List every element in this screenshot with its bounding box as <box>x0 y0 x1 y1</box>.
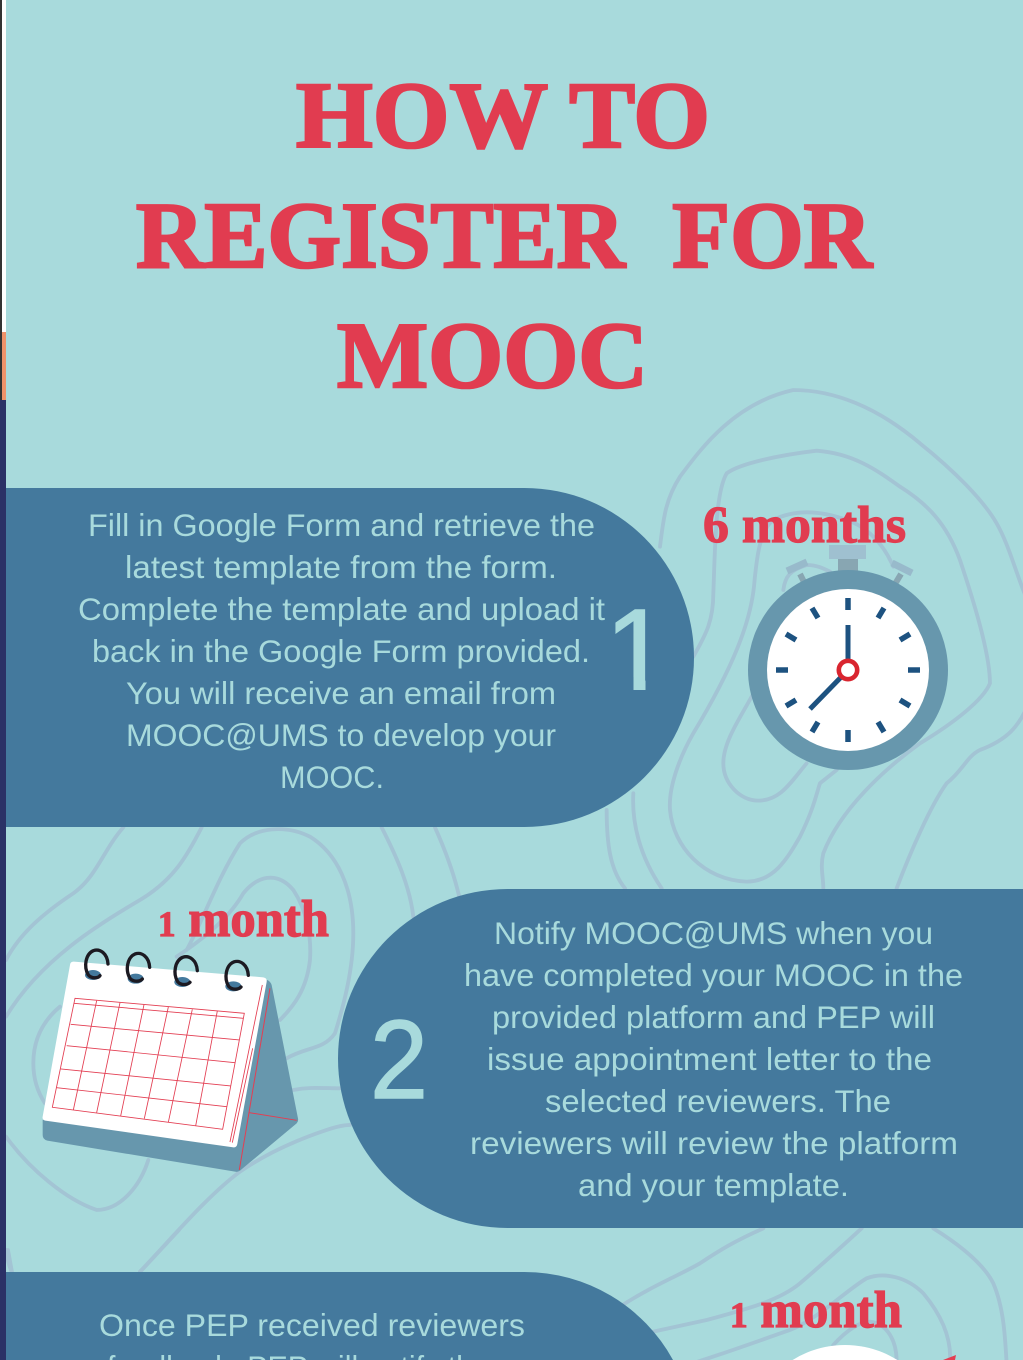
step 1 description: MOOC@UMS to develop your <box>126 717 556 753</box>
step 2 description: have completed your MOOC in the <box>464 957 963 993</box>
step 2 description: provided platform and PEP will <box>492 999 935 1035</box>
step 1 description: Complete the template and upload it <box>78 591 605 627</box>
background contour lines <box>6 390 1023 1360</box>
title: HOW TO <box>296 64 710 168</box>
icon: stopwatch <box>748 545 948 770</box>
icon: desk calendar <box>43 950 298 1172</box>
step 1 description: back in the Google Form provided. <box>92 633 590 669</box>
panel: step 2 <box>338 889 1023 1228</box>
title: REGISTER FOR <box>136 184 873 288</box>
left page edge strip <box>0 0 6 1360</box>
step 2 description: reviewers will review the platform <box>470 1125 958 1161</box>
step 1 description: MOOC. <box>280 759 384 795</box>
step 1 description: You will receive an email from <box>126 675 556 711</box>
step 1 description: Fill in Google Form and retrieve the <box>88 507 595 543</box>
icon: partially visible white circle <box>746 1345 956 1360</box>
label: 1 month (step 2): 1 month <box>158 891 329 948</box>
step 2 description: issue appointment letter to the <box>487 1041 932 1077</box>
panel: step 3 <box>6 1272 673 1360</box>
step 1 description <box>78 507 605 795</box>
step 3 description <box>99 1307 525 1360</box>
label: 6 months: 6 months <box>703 497 906 554</box>
title <box>136 64 873 408</box>
calendar grid <box>52 985 262 1143</box>
step 1 description: latest template from the form. <box>125 549 557 585</box>
step 2 description: selected reviewers. The <box>545 1083 891 1119</box>
label: 1 month (step 3): 1 month <box>730 1282 902 1339</box>
step number 1: 1 <box>605 585 670 715</box>
step 2 description <box>464 915 963 1203</box>
calendar rings <box>85 950 248 991</box>
panel: step 1 <box>6 488 694 827</box>
step 3 description: Once PEP received reviewers <box>99 1307 525 1343</box>
step 2 description: and your template. <box>578 1167 849 1203</box>
step 2 description: Notify MOOC@UMS when you <box>494 915 933 951</box>
step number 2: 2 <box>370 998 428 1122</box>
title: MOOC <box>337 304 648 408</box>
